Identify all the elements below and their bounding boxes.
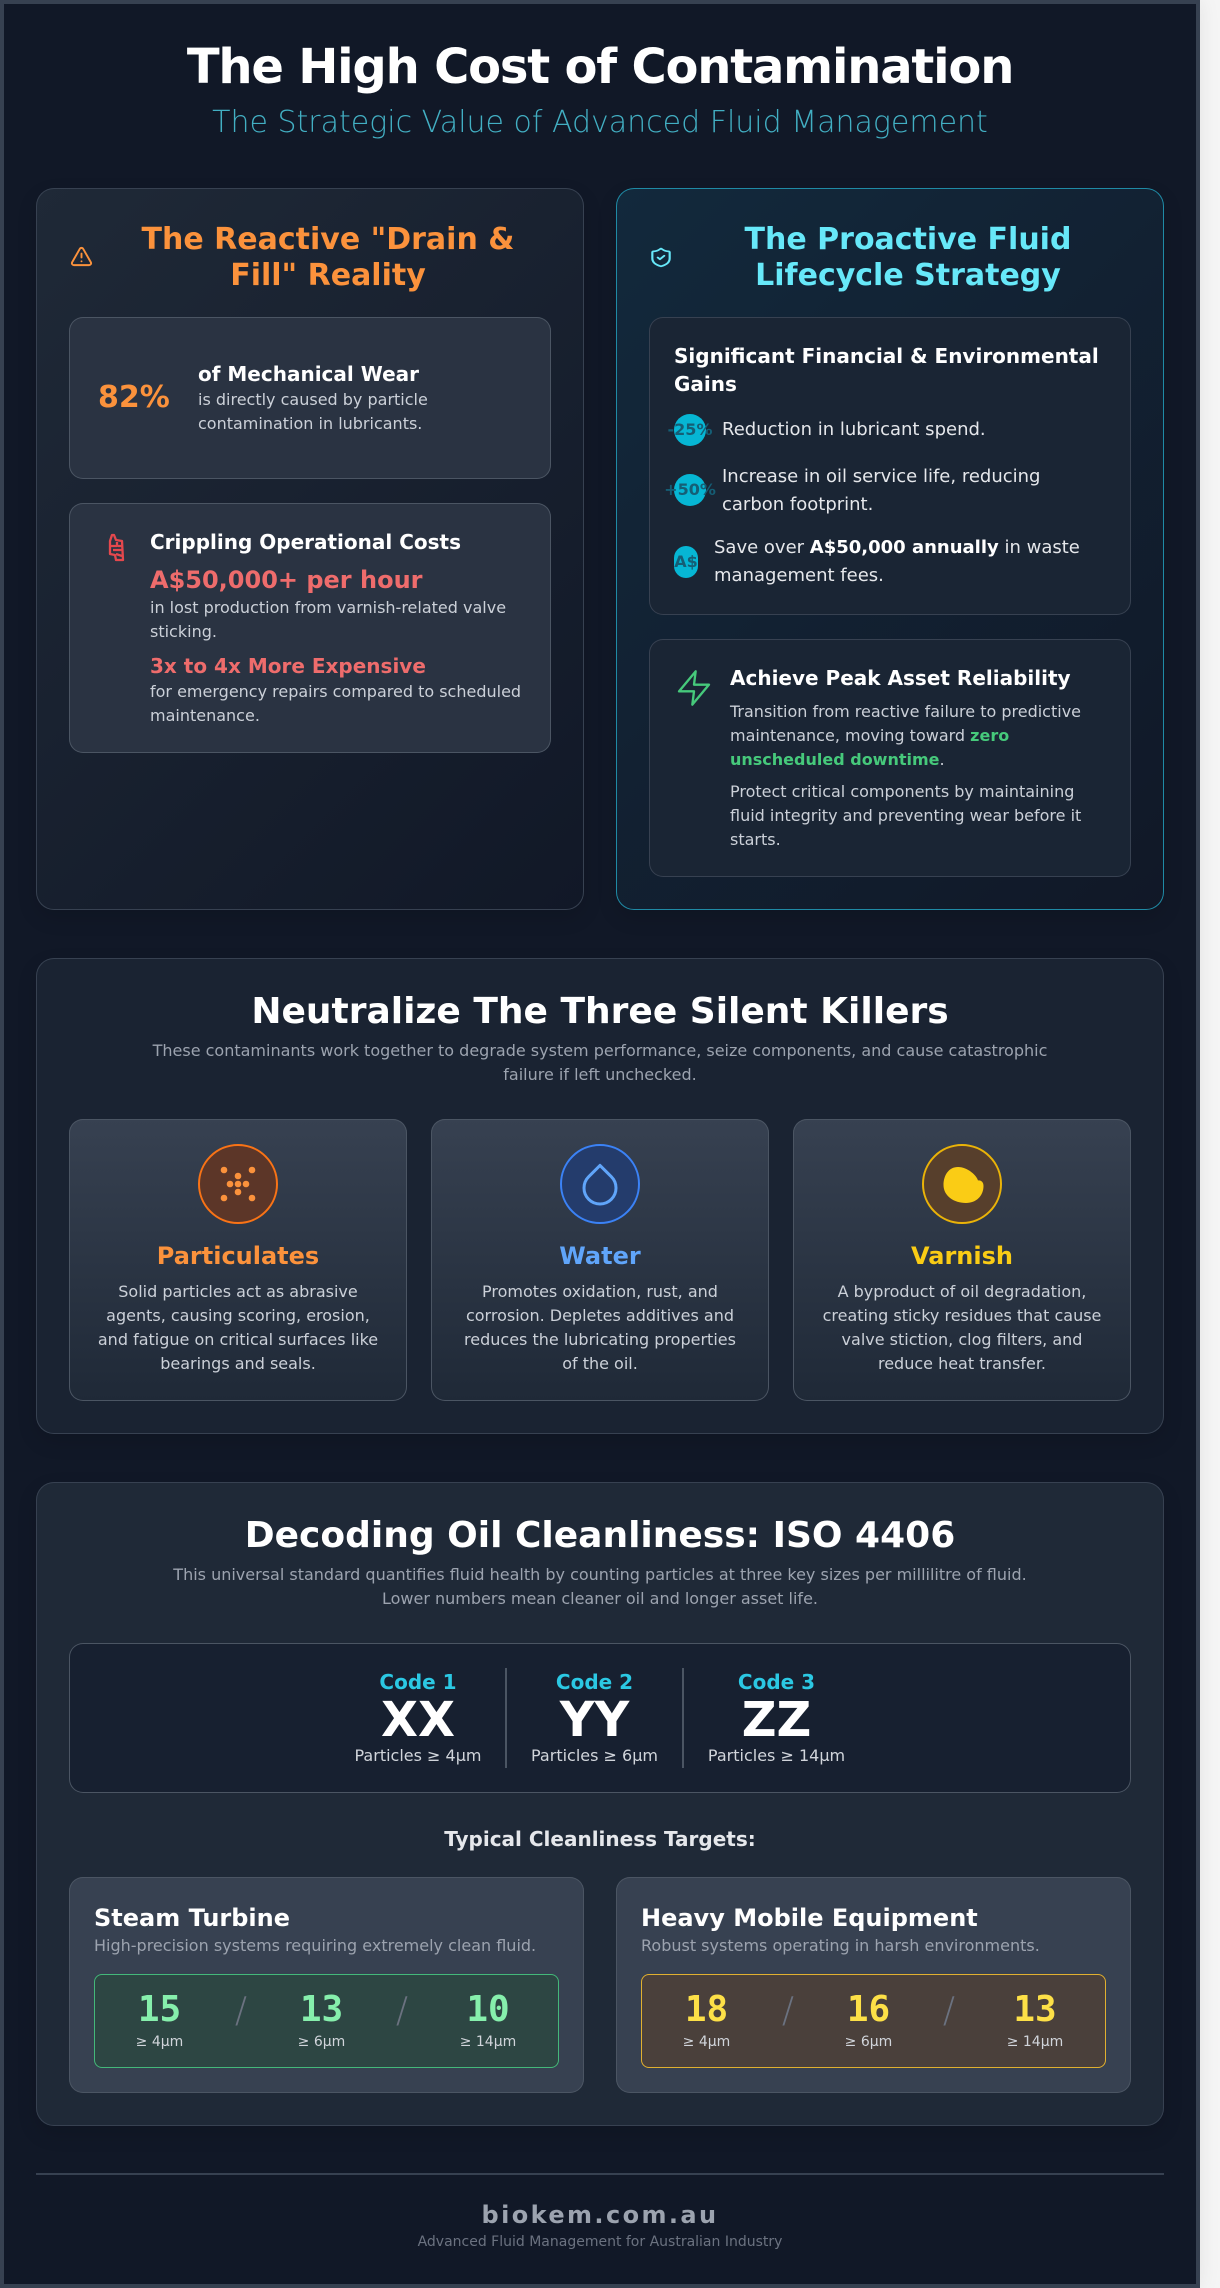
icon: hand coins xyxy=(108,534,124,562)
footer brand: biokem.com.au xyxy=(482,2201,718,2229)
card text: Robust systems operating in harsh environments. xyxy=(641,1936,1040,1955)
section heading: Neutralize The Three Silent Killers xyxy=(251,991,949,1032)
benefit text: management fees. xyxy=(714,565,884,586)
heading text: Lifecycle Strategy xyxy=(755,258,1061,293)
icon: shield check xyxy=(651,248,671,268)
card: mechanical wear stat xyxy=(69,317,551,479)
icon: water drop xyxy=(560,1144,640,1224)
code 2: Code 2 xyxy=(556,1670,633,1694)
card text: Promotes oxidation, rust, and xyxy=(482,1282,718,1301)
section intro xyxy=(152,1041,1047,1084)
separator: / xyxy=(782,1990,794,2031)
card text xyxy=(464,1282,736,1373)
card title: Particulates xyxy=(157,1242,319,1270)
card text: bearings and seals. xyxy=(160,1354,316,1373)
code 2: YY xyxy=(560,1692,629,1748)
card: peak asset reliability xyxy=(649,639,1131,877)
value: 16: 16 xyxy=(847,1989,890,2030)
card text: creating sticky residues that cause xyxy=(823,1306,1101,1325)
panel: three silent killers xyxy=(36,958,1164,1434)
target code 15/13/10 xyxy=(94,1974,559,2068)
benefit text: Increase in oil service life, reducing xyxy=(722,466,1040,487)
stat description: of Mechanical Wear xyxy=(198,362,419,386)
code 1: Particles ≥ 4µm xyxy=(354,1746,481,1765)
subtitle: The Strategic Value of Advanced Fluid Management xyxy=(212,105,988,140)
reliability text: maintenance, moving toward zero xyxy=(730,726,1009,745)
cost text: A$50,000+ per hour xyxy=(150,566,422,594)
heading text: The Reactive "Drain & xyxy=(142,222,514,257)
card title: Varnish xyxy=(911,1242,1013,1270)
card title: Heavy Mobile Equipment xyxy=(641,1904,978,1932)
heading text xyxy=(142,222,514,293)
code 1: XX xyxy=(381,1692,455,1748)
reliability text: Transition from reactive failure to predictive xyxy=(730,702,1081,721)
card: crippling operational costs xyxy=(69,503,551,753)
code 1 xyxy=(354,1670,481,1765)
stat description: contamination in lubricants. xyxy=(198,414,422,433)
separator: / xyxy=(943,1990,955,2031)
card title: Water xyxy=(559,1242,641,1270)
footer tagline: Advanced Fluid Management for Australian Industry xyxy=(418,2234,782,2250)
card: particulates xyxy=(69,1119,407,1401)
card text xyxy=(98,1282,378,1373)
benefit text xyxy=(722,466,1040,515)
reliability text xyxy=(730,666,1081,849)
label: ≥ 14µm xyxy=(460,2034,516,2050)
label: ≥ 4µm xyxy=(136,2034,183,2050)
code 3: Code 3 xyxy=(738,1670,815,1694)
card text: reduce heat transfer. xyxy=(878,1354,1046,1373)
panel heading: reactive xyxy=(70,222,514,293)
cost text xyxy=(150,530,521,725)
reliability text: starts. xyxy=(730,830,781,849)
card heading: Significant Financial & Environmental xyxy=(674,344,1099,368)
code 2 xyxy=(531,1670,658,1765)
panel heading: proactive xyxy=(651,222,1071,293)
stat description xyxy=(198,362,428,433)
ISO code diagram xyxy=(69,1643,1131,1793)
reliability text: Protect critical components by maintaining xyxy=(730,782,1074,801)
badge: -25%: -25% xyxy=(668,420,712,439)
value: 13: 13 xyxy=(1013,1989,1057,2030)
card: heavy mobile equipment target xyxy=(616,1877,1131,2093)
label: ≥ 4µm xyxy=(683,2034,730,2050)
code 3: Particles ≥ 14µm xyxy=(708,1746,845,1765)
badge: -25% xyxy=(674,414,706,446)
value: 18: 18 xyxy=(685,1989,728,2030)
section heading: Decoding Oil Cleanliness: ISO 4406 xyxy=(245,1515,955,1556)
benefit text: Save over A$50,000 annually in waste xyxy=(714,537,1080,558)
code 3: ZZ xyxy=(742,1692,811,1748)
section intro: These contaminants work together to degrade system performance, seize components, and cause catastrophic xyxy=(153,1041,1047,1060)
heading text xyxy=(744,222,1071,293)
benefit text xyxy=(714,537,1080,586)
icon: particles xyxy=(198,1144,278,1224)
code 2: Particles ≥ 6µm xyxy=(531,1746,658,1765)
card text xyxy=(823,1282,1101,1373)
cost text: sticking. xyxy=(150,622,217,641)
badge: A$ xyxy=(674,546,698,578)
value: 10: 10 xyxy=(466,1989,510,2030)
card heading xyxy=(674,344,1099,396)
card: steam turbine target xyxy=(69,1877,584,2093)
icon: varnish blob xyxy=(922,1144,1002,1224)
benefit text: Reduction in lubricant spend. xyxy=(722,419,986,440)
stat description: is directly caused by particle xyxy=(198,390,428,409)
label: ≥ 14µm xyxy=(1007,2034,1063,2050)
panel: reactive drain and fill reality xyxy=(36,188,584,910)
code 3 xyxy=(708,1670,845,1765)
separator: / xyxy=(235,1990,247,2031)
badge: A$: A$ xyxy=(674,552,698,571)
label: ≥ 6µm xyxy=(298,2034,345,2050)
section intro xyxy=(173,1565,1027,1608)
section intro: This universal standard quantifies fluid health by counting particles at three key sizes per millilitre of fluid. xyxy=(173,1565,1027,1584)
cost text: maintenance. xyxy=(150,706,260,725)
badge: +50%: +50% xyxy=(664,480,716,499)
card title: Steam Turbine xyxy=(94,1904,290,1932)
cost text: in lost production from varnish-related valve xyxy=(150,598,506,617)
value: 15: 15 xyxy=(138,1989,181,2030)
card text: High-precision systems requiring extremely clean fluid. xyxy=(94,1936,536,1955)
title: The High Cost of Contamination xyxy=(187,39,1013,95)
reliability text: unscheduled downtime. xyxy=(730,750,945,769)
card text: valve stiction, clog filters, and xyxy=(842,1330,1082,1349)
panel: decoding oil cleanliness xyxy=(36,1482,1164,2126)
code 1: Code 1 xyxy=(379,1670,457,1694)
card text: Solid particles act as abrasive xyxy=(118,1282,358,1301)
cost text: Crippling Operational Costs xyxy=(150,530,461,554)
card text: corrosion. Depletes additives and xyxy=(466,1306,734,1325)
panel: proactive fluid lifecycle strategy xyxy=(616,188,1164,910)
card text: agents, causing scoring, erosion, xyxy=(106,1306,370,1325)
card text: A byproduct of oil degradation, xyxy=(838,1282,1086,1301)
benefit text: carbon footprint. xyxy=(722,494,873,515)
card text: reduces the lubricating properties xyxy=(464,1330,736,1349)
target code 18/16/13 xyxy=(641,1974,1106,2068)
separator: / xyxy=(396,1990,408,2031)
stat: 82%: 82% xyxy=(98,380,170,415)
heading text: The Proactive Fluid xyxy=(745,222,1071,257)
reliability text: Achieve Peak Asset Reliability xyxy=(730,666,1071,690)
cost text: 3x to 4x More Expensive xyxy=(150,654,426,678)
icon: lightning bolt xyxy=(678,670,710,706)
card heading: Gains xyxy=(674,372,737,396)
icon: warning triangle xyxy=(70,246,92,266)
card: water xyxy=(431,1119,769,1401)
card text: of the oil. xyxy=(562,1354,638,1373)
card: financial and environmental gains xyxy=(649,317,1131,615)
section intro: failure if left unchecked. xyxy=(503,1065,697,1084)
card text: and fatigue on critical surfaces like xyxy=(98,1330,378,1349)
label: ≥ 6µm xyxy=(845,2034,892,2050)
heading text: Fill" Reality xyxy=(230,258,426,293)
badge: +50% xyxy=(674,474,706,506)
cost text: for emergency repairs compared to scheduled xyxy=(150,682,521,701)
reliability text: fluid integrity and preventing wear before it xyxy=(730,806,1081,825)
value: 13: 13 xyxy=(300,1989,343,2030)
card: varnish xyxy=(793,1119,1131,1401)
targets heading: Typical Cleanliness Targets: xyxy=(444,1827,756,1851)
section intro: Lower numbers mean cleaner oil and longer asset life. xyxy=(382,1589,818,1608)
